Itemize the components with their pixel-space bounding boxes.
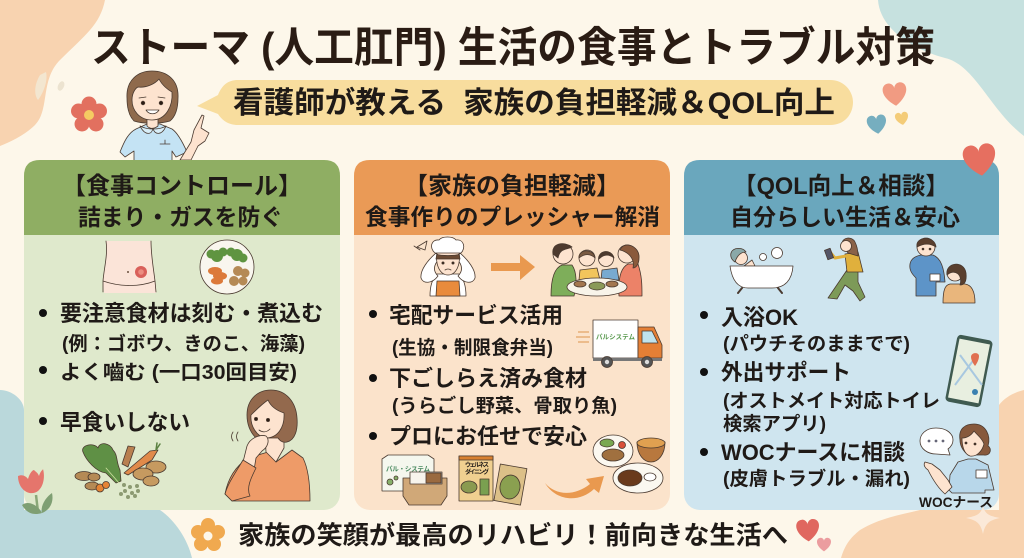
- icon: decorative flower: [71, 96, 107, 132]
- panel heading: QOL: 自分らしい生活＆安心: [730, 204, 960, 230]
- icon: footer hearts: [796, 519, 831, 551]
- bullet list: services: (うらごし野菜、骨取り魚): [392, 394, 617, 417]
- icon: person in bathtub: [730, 248, 793, 293]
- panel heading: meal control: 詰まり・ガスを防ぐ: [78, 204, 283, 230]
- icon: tulip: [18, 469, 53, 514]
- label: WOC nurse: WOCナース: [919, 495, 993, 510]
- panel heading: QOL: [730, 173, 960, 230]
- bullet list: QOL points: 検索アプリ): [723, 413, 826, 435]
- icon: walking person with phone: [824, 238, 865, 301]
- icon: delivery truck: パルシステム: [596, 333, 636, 341]
- panel heading: family burden: 食事作りのプレッシャー解消: [365, 204, 660, 230]
- icon: footer flower: [191, 518, 225, 551]
- icon: frozen meal packs: [459, 456, 527, 505]
- icon: meal kit boxes: パル・システム: [386, 465, 430, 473]
- bullet list: services: 宅配サービス活用: [389, 303, 563, 328]
- title: ストーマ (人工肛門) 生活の食事とトラブル対策: [91, 24, 935, 71]
- icon: nurse pointing: [120, 71, 209, 165]
- bullet list: QOL points: (皮膚トラブル・漏れ): [723, 467, 910, 490]
- bullet list: meal points: よく嚙む (一口30回目安): [60, 361, 297, 384]
- bullet list: QOL points: 入浴OK: [721, 305, 798, 330]
- bullet list: meal points: 早食いしない: [60, 410, 190, 435]
- arrow: curved to meals: [545, 476, 604, 498]
- arrow: stress to relief: [491, 255, 535, 280]
- icon: stoma on abdomen: [103, 241, 156, 293]
- bullet list: services: (生協・制限食弁当): [392, 336, 553, 359]
- panel: meal control: [24, 160, 340, 510]
- icon: vegetables: [75, 443, 166, 499]
- icon: frozen meal packs: ウェルネス: [465, 461, 489, 469]
- footer message: 家族の笑顔が最高のリハビリ！前向きな生活へ: [238, 521, 788, 550]
- bullet list: services: [369, 303, 617, 449]
- bullet list: QOL points: (パウチそのままでで): [723, 333, 910, 355]
- bullet list: meal points: [39, 301, 323, 435]
- icon: stressed chef: [414, 237, 475, 296]
- icon: speech bubble: [920, 428, 953, 455]
- bullet list: meal points: (例：ゴボウ、きのこ、海藻): [62, 332, 305, 355]
- icon: delivery truck: [576, 320, 662, 368]
- bullet list: QOL points: [700, 305, 940, 490]
- icon: plate of vegetables: [200, 240, 254, 294]
- panel heading: meal control: [62, 173, 302, 230]
- bullet list: QOL points: (オストメイト対応トイレ: [723, 390, 940, 412]
- panel heading: meal control: 【食事コントロール】: [62, 173, 302, 200]
- bullet list: services: 下ごしらえ済み食材: [389, 366, 587, 391]
- icon: frozen meal packs: ダイニング: [465, 468, 489, 476]
- panel heading: family burden: [365, 173, 660, 230]
- icon: WOC nurse: [924, 424, 994, 494]
- icon: smartphone map: [945, 334, 993, 408]
- panel: QOL and consultation: [684, 160, 999, 510]
- icon: decorative hearts: [866, 82, 998, 178]
- panel: family burden reduction: [354, 160, 670, 510]
- panel heading: family burden: 【家族の負担軽減】: [404, 173, 620, 200]
- icon: finished meals: [593, 435, 665, 493]
- icon: meal kit boxes: [382, 455, 447, 505]
- icon: nurse and patient: [910, 238, 975, 303]
- subtitle speech banner: [197, 80, 853, 125]
- bullet list: services: プロにお任せで安心: [389, 424, 587, 449]
- bullet list: QOL points: WOCナースに相談: [721, 440, 905, 465]
- bullet list: meal points: 要注意食材は刻む・煮込む: [60, 301, 323, 326]
- panel heading: QOL: 【QOL向上＆相談】: [733, 173, 949, 200]
- subtitle speech banner: 看護師が教える 家族の負担軽減＆QOL向上: [233, 86, 835, 120]
- bullet list: QOL points: 外出サポート: [721, 360, 851, 385]
- icon: family at table: [551, 244, 642, 296]
- icon: woman chewing: [225, 390, 310, 501]
- icon: sparkle: [966, 506, 1000, 534]
